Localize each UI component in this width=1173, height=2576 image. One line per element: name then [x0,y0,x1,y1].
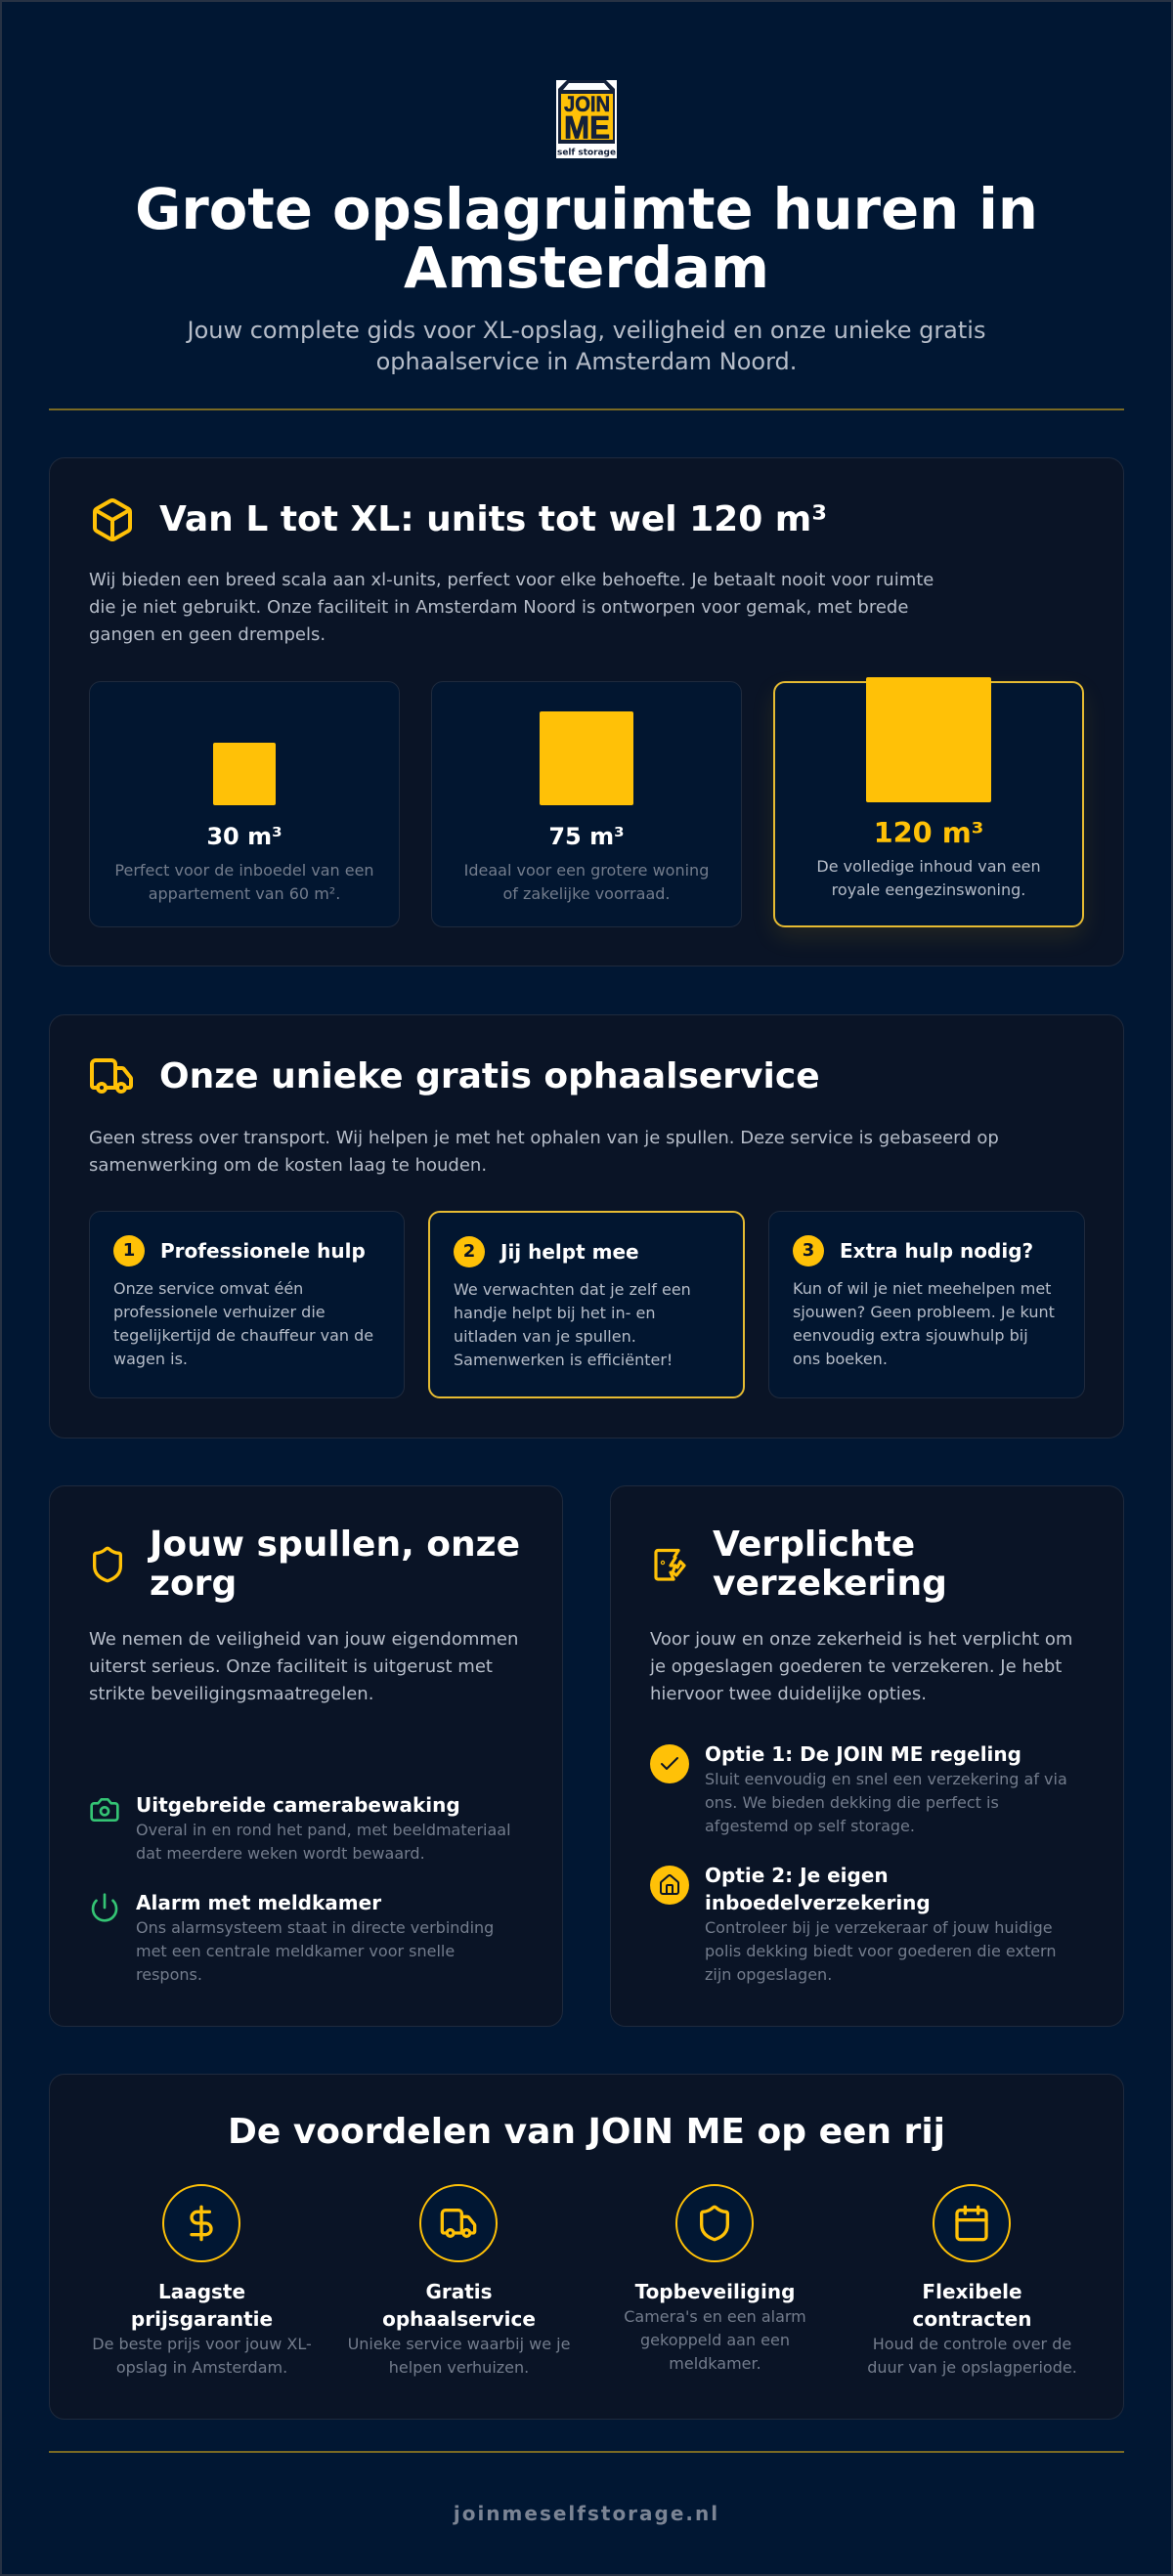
feature text: Overal in en rond het pand, met beeldmateriaal [136,1821,511,1839]
panel: units van L tot XL [49,457,1124,966]
intro text: strikte beveiligingsmaatregelen. [89,1684,373,1704]
benefit text: helpen verhuizen. [389,2358,529,2377]
icon: truck [419,2184,498,2262]
feature text: met een centrale meldkamer voor snelle [136,1942,455,1960]
title [135,177,1038,301]
subtitle: Jouw complete gids voor XL-opslag, veiligheid en onze unieke gratis [188,317,985,344]
step title 2: Jij helpt mee [500,1240,639,1264]
feature text [136,1821,511,1863]
option title [705,1864,931,1914]
intro text: uiterst serieus. Onze faciliteit is uitgerust met [89,1656,493,1677]
step text 1: Onze service omvat één [113,1279,303,1298]
heading: verzekering [713,1564,947,1604]
logo: ME [564,109,610,145]
icon: power [92,1893,117,1922]
unit description 30 [114,861,374,903]
intro text: Voor jouw en onze zekerheid is het verplicht om [650,1629,1072,1650]
intro text: Geen stress over transport. Wij helpen je met het ophalen van je spullen. Deze service is gebaseerd op [89,1128,999,1148]
number 1 [113,1235,145,1267]
benefit text: duur van je opslagperiode. [867,2358,1077,2377]
intro text [89,570,934,645]
logo: self storage [557,149,616,158]
heading: De voordelen van JOIN ME op een rij [228,2112,945,2152]
icon: shield [675,2184,754,2262]
heading: Jouw spullen, onze [150,1524,520,1565]
option text: polis dekking biedt voor goederen die extern [705,1942,1056,1960]
benefit text [92,2335,312,2377]
unit block 75 [540,711,633,805]
benefit text [624,2307,806,2373]
icon: truck [90,1058,133,1094]
panel: veiligheid [49,1485,563,2027]
unit: 30 m3 [89,681,400,927]
option 2 [650,1864,1056,1984]
intro text: je opgeslagen goederen te verzekeren. Je hebt [650,1656,1062,1677]
unit description 75: of zakelijke voorraad. [502,884,670,903]
step title 1: Professionele hulp [160,1239,366,1263]
feature: alarm [92,1891,494,1984]
unit description 120: royale eengezinswoning. [832,880,1025,899]
feature: camerabewaking [90,1793,511,1863]
heading [147,1524,520,1604]
benefit text: Houd de controle over de [873,2335,1071,2353]
benefit text: opslag in Amsterdam. [116,2358,287,2377]
unit block 120 [866,677,991,802]
unit size 75: 75 m³ [548,823,625,850]
benefit: contracten [867,2184,1077,2377]
feature text: Ons alarmsysteem staat in directe verbinding [136,1918,494,1937]
benefit text: gekoppeld aan een [640,2331,790,2349]
option title: Optie 2: Je eigen [705,1864,889,1887]
step text 1: wagen is. [113,1350,188,1368]
step text 3: sjouwen? Geen probleem. Je kunt [793,1303,1055,1321]
number 2: 2 [463,1241,475,1262]
unit description 30: appartement van 60 m². [149,884,340,903]
icon: check [650,1744,689,1783]
heading [713,1524,947,1604]
intro text: die je niet gebruikt. Onze faciliteit in Amsterdam Noord is ontworpen voor gemak, met brede [89,597,908,618]
heading: Onze unieke gratis ophaalservice [159,1056,820,1096]
step text 2: Samenwerken is efficiënter! [454,1351,673,1369]
intro text: samenwerking om de kosten laag te houden. [89,1155,487,1176]
icon: box [93,498,132,541]
intro text: gangen en geen drempels. [89,624,326,645]
step text 3: eenvoudig extra sjouwhulp bij [793,1326,1028,1345]
benefit text [348,2335,570,2377]
unit block 30 [213,743,276,805]
number 1: 1 [123,1240,135,1261]
option 1 [650,1742,1067,1835]
benefit text: Camera's en een alarm [624,2307,806,2326]
benefit text: meldkamer. [669,2354,761,2373]
icon: house [650,1866,689,1905]
intro text: Wij bieden een breed scala aan xl-units, perfect voor elke behoefte. Je betaalt nooit voor ruimte [89,570,934,590]
number 3 [793,1235,824,1267]
step text 2: uitladen van je spullen. [454,1327,636,1346]
step text 1: tegelijkertijd de chauffeur van de [113,1326,373,1345]
benefit: ophaalservice [348,2184,570,2377]
step text 3 [793,1279,1055,1368]
intro text [649,1629,1072,1704]
panel: voordelen [49,2074,1124,2420]
option text: Sluit eenvoudig en snel een verzekering af via [705,1770,1067,1788]
subtitle [186,317,985,375]
logo [556,80,617,158]
icon: dollar [162,2184,240,2262]
feature text: respons. [136,1965,202,1984]
number 2 [454,1236,485,1267]
feature title: Uitgebreide camerabewaking [136,1793,460,1817]
benefit text [867,2335,1077,2377]
step title 3: Extra hulp nodig? [840,1239,1033,1263]
benefit title: Gratis [425,2280,493,2303]
panel: gratis ophaalservice [49,1014,1124,1438]
step text 2: handje helpt bij het in- en [454,1304,655,1322]
benefit title [913,2280,1031,2331]
option text [705,1770,1067,1835]
number 3: 3 [803,1240,814,1261]
unit size 120: 120 m³ [874,816,983,849]
unit description 120: De volledige inhoud van een [816,857,1041,876]
option title: Optie 1: De JOIN ME regeling [705,1742,1021,1766]
step text 1: professionele verhuizer die [113,1303,326,1321]
panel: verzekering [610,1485,1124,2027]
option title: inboedelverzekering [705,1891,931,1914]
step text 2 [454,1280,691,1369]
feature text: dat meerdere weken wordt bewaard. [136,1844,425,1863]
benefit text: Unieke service waarbij we je [348,2335,570,2353]
benefit title: Flexibele [922,2280,1022,2303]
heading: Van L tot XL: units tot wel 120 m³ [159,499,827,539]
benefit text: De beste prijs voor jouw XL- [92,2335,312,2353]
option text: afgestemd op self storage. [705,1817,915,1835]
step text 3: ons boeken. [793,1350,888,1368]
benefit title: prijsgarantie [131,2307,273,2331]
benefit: prijs [92,2184,312,2377]
step 1 [89,1211,405,1398]
unit description 75: Ideaal voor een grotere woning [464,861,709,880]
step 3 [768,1211,1085,1398]
benefit: beveiliging [624,2184,806,2373]
unit description 120 [816,857,1041,899]
intro text: We nemen de veiligheid van jouw eigendommen [89,1629,518,1650]
unit: 120 m3 highlighted [773,681,1084,927]
benefit title [382,2280,536,2331]
heading: Verplichte [713,1524,915,1565]
unit description 75 [464,861,709,903]
footer url: joinmeselfstorage.nl [454,2502,719,2525]
step text 2: We verwachten dat je zelf een [454,1280,691,1299]
title: Amsterdam [404,236,769,301]
icon: shield [93,1546,122,1583]
icon: broken door [654,1548,686,1581]
benefit title: contracten [913,2307,1031,2331]
feature text [136,1918,494,1984]
step text 1 [113,1279,373,1368]
benefit title: Topbeveiliging [635,2280,795,2303]
step 2 highlighted [428,1211,745,1398]
title: Grote opslagruimte huren in [135,177,1038,242]
intro text: hiervoor twee duidelijke opties. [650,1684,927,1704]
benefit title [131,2280,273,2331]
step text 3: Kun of wil je niet meehelpen met [793,1279,1051,1298]
option text: Controleer bij je verzekeraar of jouw huidige [705,1918,1053,1937]
intro text [89,1128,999,1176]
icon: calendar [933,2184,1011,2262]
option text: zijn opgeslagen. [705,1965,832,1984]
unit size 30: 30 m³ [206,823,282,850]
option text [705,1918,1056,1984]
subtitle: ophaalservice in Amsterdam Noord. [376,348,797,375]
benefit title: ophaalservice [382,2307,536,2331]
benefit title: Laagste [158,2280,245,2303]
unit description 30: Perfect voor de inboedel van een [114,861,374,880]
heading: zorg [150,1564,237,1604]
intro text [89,1629,518,1704]
logo: JOIN [564,92,610,116]
feature title: Alarm met meldkamer [136,1891,381,1914]
unit: 75 m3 [431,681,742,927]
icon: camera [90,1798,119,1822]
option text: ons. We bieden dekking die perfect is [705,1793,999,1812]
